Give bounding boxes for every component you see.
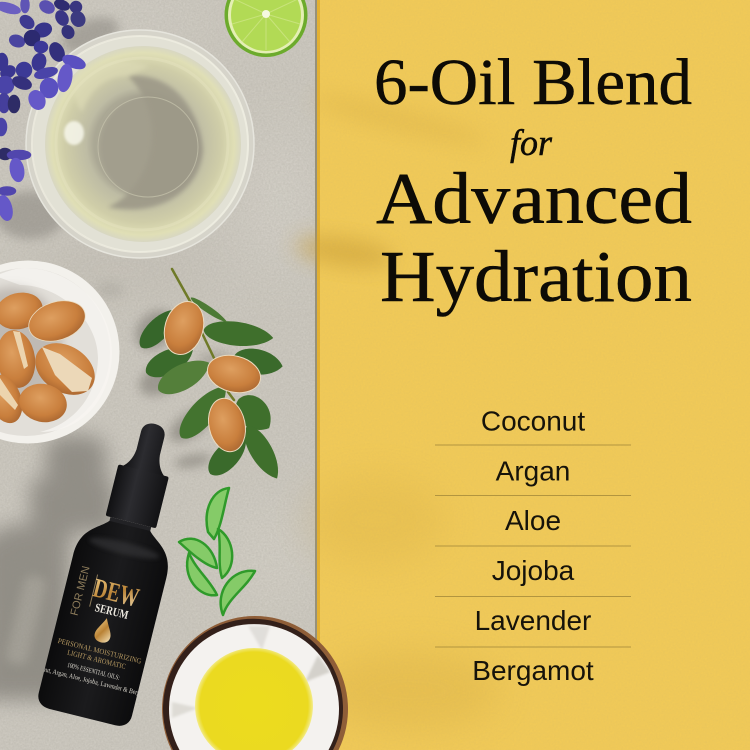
nut 1 <box>0 288 47 334</box>
product descriptor <box>44 638 142 696</box>
panel shadows <box>294 87 500 730</box>
dropper bulb <box>122 419 177 477</box>
leaves <box>133 295 286 484</box>
icon: gold drop <box>93 616 115 644</box>
title line: Hydration: Hydration <box>380 236 692 317</box>
product descriptor: LIGHT & AROMATIC <box>66 648 127 671</box>
aloe slices <box>179 488 255 615</box>
glass bowl of oil <box>26 30 254 258</box>
nut 4 <box>26 333 104 405</box>
serum bottle <box>38 424 168 726</box>
bowl highlight <box>64 121 84 145</box>
collar <box>106 464 169 528</box>
shadow: lavender and bowl <box>0 11 124 298</box>
brand: for men: FOR MEN <box>69 565 93 617</box>
shoulder sheen <box>88 534 161 563</box>
stems <box>172 269 234 400</box>
title <box>374 46 692 317</box>
item: Aloe: Aloe <box>505 505 561 536</box>
icon: lavender sprigs <box>0 0 87 221</box>
grain on stone <box>0 0 316 750</box>
item: Jojoba: Jojoba <box>492 555 575 586</box>
item: Argan: Argan <box>496 456 570 486</box>
nut 2 <box>24 294 90 348</box>
brand: serum: SERUM <box>94 600 130 622</box>
coconut half with oil <box>162 616 348 750</box>
product descriptor: PERSONAL MOISTURIZING <box>57 636 143 666</box>
white bowl of argan nuts <box>0 260 120 444</box>
item: Coconut: Coconut <box>481 406 585 436</box>
body <box>36 514 176 729</box>
product descriptor: 100% ESSENTIAL OILS: <box>66 661 121 682</box>
stone background <box>0 0 316 750</box>
neck <box>107 517 151 543</box>
nut 5 <box>0 370 29 428</box>
item: Lavender: Lavender <box>475 605 591 636</box>
nut 3 <box>0 328 39 390</box>
coconut oil <box>195 648 313 750</box>
title line: for: for <box>510 123 553 164</box>
stone mottling <box>20 2 320 620</box>
argan branch <box>133 269 286 484</box>
shadow: bottle and glass <box>0 435 115 700</box>
lime segments <box>232 0 300 50</box>
brand divider <box>89 574 98 607</box>
icon: lime slice <box>224 0 308 57</box>
product descriptor: Coconut, Argan, Aloe, Jojoba, Lavender & Bergamot <box>30 662 152 700</box>
ingredient list <box>435 406 631 686</box>
shadow: leaves and nuts <box>127 302 233 470</box>
shadow: glass streak highlight <box>4 574 48 666</box>
yellow panel <box>294 0 750 750</box>
coconut flesh shading <box>172 626 330 718</box>
nut 6 <box>16 379 70 427</box>
item: Bergamot: Bergamot <box>472 655 594 686</box>
bowl inner well <box>100 95 200 199</box>
bowl pale oil swirl <box>74 61 150 112</box>
brand: DEW: DEW <box>90 572 142 613</box>
bowl shadow wedge <box>108 76 203 209</box>
title line: Advanced: Advanced <box>376 158 692 239</box>
cast shadows on stone <box>0 11 233 700</box>
title line: 6-Oil Blend: 6-Oil Blend <box>374 46 692 119</box>
branch nuts <box>158 297 210 359</box>
